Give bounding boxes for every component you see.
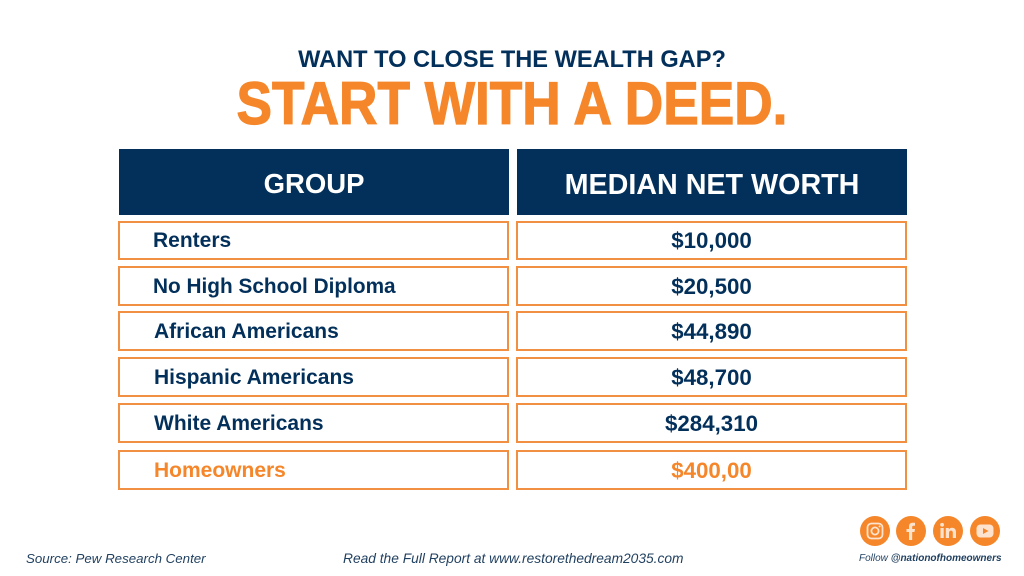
- row value: african americans: $44,890: [671, 319, 752, 344]
- title: main headline: START WITH A DEED.: [237, 70, 787, 137]
- row label: no high school diploma: No High School Diploma: [153, 275, 396, 298]
- row value: hispanic americans: $48,700: [671, 365, 752, 390]
- row label: homeowners: Homeowners: [154, 459, 286, 482]
- row label: renters: [118, 220, 509, 260]
- row value: hispanic americans: [516, 357, 907, 396]
- row value: white americans: [516, 403, 907, 442]
- footer: follow handle: Follow @nationofhomeowners: [859, 553, 1002, 564]
- row value: renters: $10,000: [671, 228, 752, 252]
- footer: report link: Read the Full Report at www.restorethedream2035.com: [343, 550, 683, 566]
- row label: no high school diploma: [118, 266, 509, 306]
- row value: no high school diploma: [516, 266, 907, 306]
- row label: african americans: African Americans: [154, 320, 339, 343]
- row label: white americans: White Americans: [154, 412, 324, 435]
- row value: homeowners: [516, 450, 907, 490]
- icon: linkedin: [933, 516, 963, 546]
- row value: white americans: $284,310: [665, 411, 758, 436]
- row value: no high school diploma: $20,500: [671, 274, 752, 299]
- row label: hispanic americans: [118, 357, 509, 396]
- row label: renters: Renters: [153, 228, 231, 252]
- row value: african americans: [516, 311, 907, 350]
- row label: white americans: [118, 403, 509, 442]
- row label: hispanic americans: Hispanic Americans: [154, 366, 354, 389]
- row label: homeowners: [118, 450, 509, 490]
- icon: instagram: [860, 516, 890, 546]
- footer: source: Source: Pew Research Center: [26, 550, 206, 566]
- icon: youtube: [970, 516, 1000, 546]
- table header: median net worth: [517, 149, 907, 214]
- row value: renters: [516, 220, 907, 260]
- table header: median net worth: MEDIAN NET WORTH: [565, 169, 859, 201]
- table header: group: GROUP: [264, 168, 364, 199]
- table header: group: [119, 149, 509, 214]
- row label: african americans: [118, 311, 509, 350]
- icon: facebook: [896, 516, 926, 546]
- row value: homeowners: $400,00: [671, 458, 752, 483]
- title: kicker: WANT TO CLOSE THE WEALTH GAP?: [298, 47, 726, 73]
